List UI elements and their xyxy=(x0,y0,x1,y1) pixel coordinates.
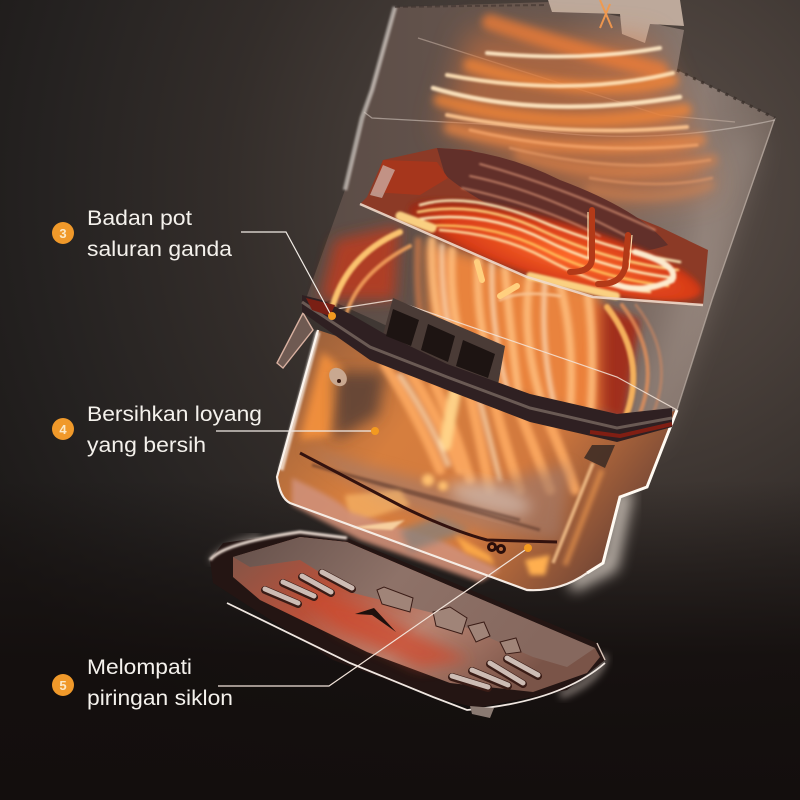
badge 4 xyxy=(52,418,74,440)
badge 4: 4 xyxy=(59,422,67,437)
air fryer exploded illustration xyxy=(210,0,775,718)
heater plate and coil xyxy=(360,148,709,321)
tray fins xyxy=(265,572,538,688)
badge 3: 3 xyxy=(59,226,67,241)
label 4: Bersihkan loyang xyxy=(87,403,262,426)
left handle xyxy=(277,313,313,368)
rack rim with grid handle xyxy=(302,295,672,468)
badge 5: 5 xyxy=(59,678,67,693)
glow halos xyxy=(212,490,625,695)
red glow around airflow xyxy=(320,225,640,420)
callout 4: Bersihkan loyang yang bersih xyxy=(52,403,379,457)
callout 5: Melompati piringan siklon: piringan siklon xyxy=(87,687,233,710)
leader line 4 xyxy=(216,427,379,435)
badge 5 xyxy=(52,674,74,696)
callout 3: Badan pot saluran ganda xyxy=(52,207,336,320)
label 5: Melompati xyxy=(87,656,192,679)
callout 5: Melompati piringan siklon xyxy=(52,544,532,710)
outer housing xyxy=(302,2,775,573)
callout 3: Badan pot saluran ganda: saluran ganda xyxy=(87,238,232,261)
middle airflow streaks xyxy=(331,232,661,430)
badge 3 xyxy=(52,222,74,244)
label 3: Badan pot xyxy=(87,207,192,230)
leader line 5 xyxy=(218,544,532,686)
top fan bracket xyxy=(548,0,684,43)
swirling hot air xyxy=(433,22,715,210)
callout 4: Bersihkan loyang yang bersih: yang bersih xyxy=(87,434,206,457)
inner basket xyxy=(277,300,677,590)
leader line 3 xyxy=(241,232,336,320)
lower cyclone tray xyxy=(210,532,605,718)
